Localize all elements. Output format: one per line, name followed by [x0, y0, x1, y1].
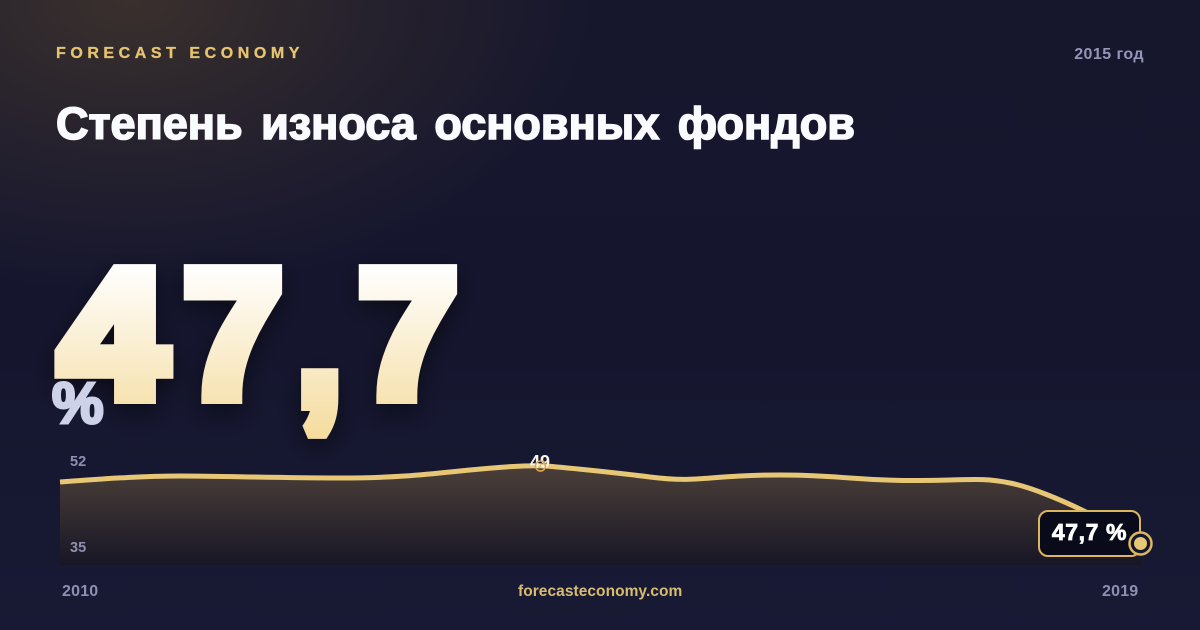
- start year: 2010: [62, 583, 98, 600]
- line: [60, 466, 1090, 514]
- big value 47,7: ,: [297, 241, 342, 442]
- area chart: [60, 466, 1141, 565]
- callout 47,7 %: 47,7 %: [1052, 519, 1127, 545]
- peak marker and label 49: 49: [530, 452, 550, 472]
- year label: 2015 год: [1074, 46, 1144, 63]
- callout 47,7 %: [1039, 511, 1140, 556]
- percent sign: %: [52, 371, 104, 436]
- axis label 35: 35: [70, 540, 86, 556]
- area fill: [60, 466, 1141, 565]
- big value 47,7: [60, 234, 457, 442]
- title: Степень износа основных фондов: [56, 98, 855, 149]
- big value 47,7: 7: [359, 234, 457, 435]
- brand label: FORECAST ECONOMY: [56, 45, 304, 62]
- end year: 2019: [1102, 583, 1138, 600]
- axis label 52: 52: [70, 454, 86, 470]
- big value 47,7: 7: [184, 234, 282, 435]
- end point marker: [1130, 532, 1152, 554]
- source link: forecasteconomy.com: [518, 583, 682, 600]
- big value 47,7: 4: [60, 234, 166, 435]
